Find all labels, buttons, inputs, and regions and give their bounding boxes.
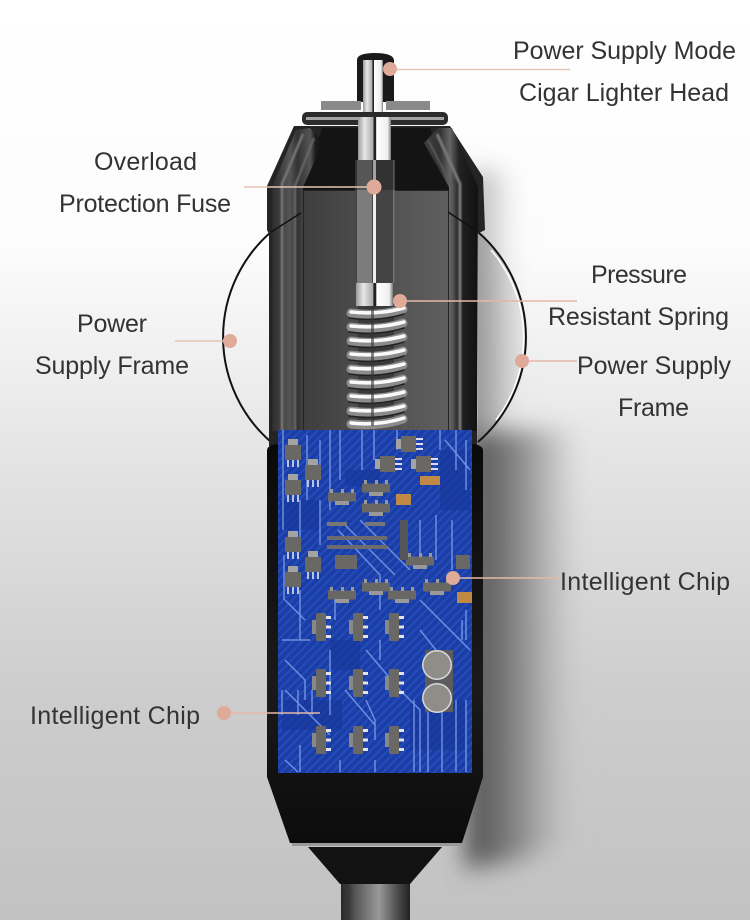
knurled disc [321,101,430,110]
lower housing [267,444,483,843]
callout: overload protection fuse [59,148,382,218]
callout: power supply frame right: Power Supply [577,352,732,380]
callout: power supply frame right [515,352,732,422]
callout: power supply frame right: Frame [618,394,689,422]
inner cavity [302,128,450,190]
callout: overload protection fuse: Overload [94,148,197,176]
transistors [285,436,470,754]
callout: pressure resistant spring: Pressure [591,261,687,289]
orange components [396,476,472,603]
spring [349,306,404,426]
glass fuse [355,160,395,283]
callout: power supply frame left: Supply Frame [35,352,189,380]
capacitors [422,650,453,713]
callout: pressure resistant spring: Resistant Spring [548,303,729,331]
device drop shadow [465,170,580,868]
outer arc segments over housing [271,212,478,232]
callout: overload protection fuse: Protection Fuse [59,190,231,218]
callout: power supply mode: Power Supply Mode [513,37,736,65]
callout: power supply frame left: Power [77,310,147,338]
left shoulder contact [272,128,323,431]
metal tube [358,117,391,160]
callout: intelligent chip left [30,702,320,730]
callout: intelligent chip right [446,568,730,596]
upper housing [267,126,485,446]
base ring [302,112,448,125]
pin [357,53,394,112]
cable [341,884,410,920]
board traces [282,430,470,772]
circuit board [278,430,472,773]
callout: intelligent chip left: Intelligent Chip [30,702,200,730]
callout: intelligent chip right: Intelligent Chip [560,568,730,596]
callout: power supply mode [383,37,736,107]
inner grey panel [304,191,448,431]
right shoulder contact [424,128,478,431]
collar [292,843,462,846]
power supply frame arcs [223,232,526,442]
lower fuse cap [356,283,393,306]
callout: power supply frame left [35,310,237,380]
callout: power supply mode: Cigar Lighter Head [519,79,729,107]
dark substrate mottling [280,450,470,750]
charger plug device [267,53,485,920]
lower cone [308,847,442,884]
callout: pressure resistant spring [393,261,729,331]
